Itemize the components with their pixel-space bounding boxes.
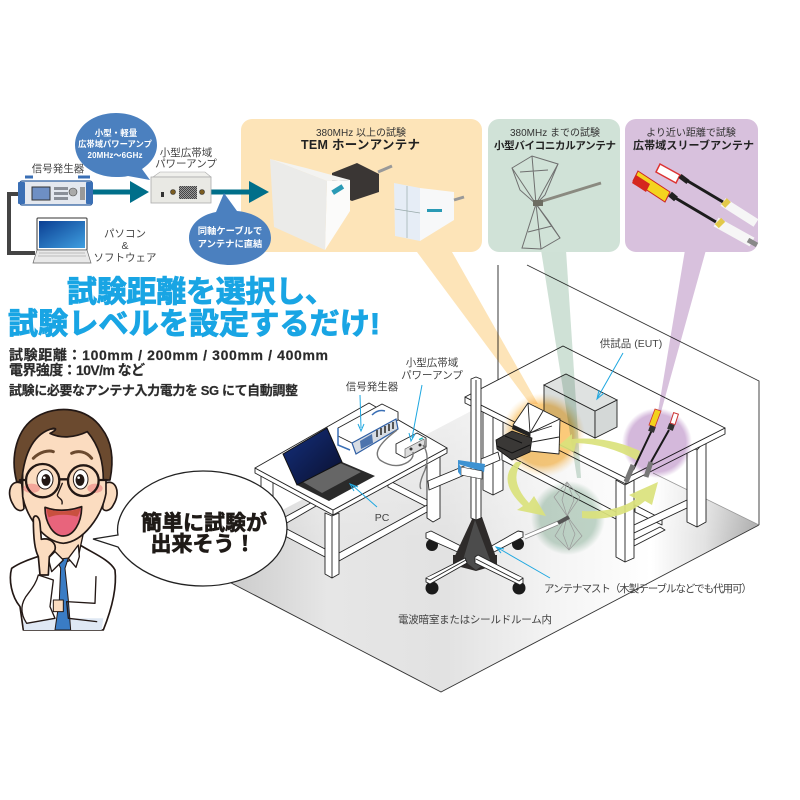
small sleeve antenna bbox=[656, 164, 756, 223]
tie bbox=[55, 558, 71, 630]
label: chamber: 電波暗室またはシールドルーム内 bbox=[398, 613, 552, 626]
black horn body bbox=[332, 163, 379, 201]
panel: TEM horn antenna bbox=[241, 119, 482, 252]
face bbox=[23, 427, 106, 543]
laptop on table bbox=[283, 428, 375, 501]
callout: compact power amp: 小型・軽量 bbox=[95, 128, 138, 138]
callout: compact power amp: 広帯域パワーアンプ bbox=[78, 139, 153, 149]
room floor bbox=[187, 397, 759, 692]
label: power amp on table: パワーアンプ bbox=[401, 370, 463, 382]
glow: biconical position bbox=[531, 481, 605, 555]
sleeve antennas in position bbox=[626, 409, 678, 482]
label: PC: PC bbox=[375, 512, 390, 524]
eyebrows bbox=[33, 451, 92, 458]
icon: laptop bbox=[33, 218, 91, 263]
crossed arm bbox=[67, 577, 97, 622]
antenna mast bbox=[426, 377, 526, 594]
signal generator on table bbox=[338, 404, 398, 454]
character: man with glasses bbox=[10, 409, 117, 630]
right table bbox=[465, 346, 725, 562]
yellow-green arrows bbox=[507, 434, 658, 519]
callout arrow: mast bbox=[496, 547, 550, 578]
mouth bbox=[45, 507, 82, 536]
cable: signal generator to PC bbox=[9, 194, 35, 253]
sleeve and forearm bbox=[22, 575, 55, 623]
text block: test parameters: 電界強度：10V/m など bbox=[9, 362, 145, 378]
title: 試験レベルを設定するだけ! bbox=[8, 308, 380, 341]
power amp on table bbox=[396, 433, 426, 458]
label: PC and software: ソフトウェア bbox=[94, 252, 156, 264]
light beam: TEM horn bbox=[417, 252, 538, 404]
icon: power amp bbox=[151, 172, 211, 203]
glow: horn position bbox=[501, 393, 585, 477]
callout arrow: power amp bbox=[409, 385, 422, 441]
panel heading: 広帯域スリーブアンテナ bbox=[633, 138, 754, 152]
second white horn bbox=[394, 183, 464, 241]
upper mouth shade bbox=[47, 508, 80, 517]
speech balloon: 出来そう！ bbox=[150, 533, 256, 556]
arrow: amp to antenna bbox=[211, 181, 269, 203]
biconical antenna bbox=[512, 156, 601, 249]
hair bbox=[14, 409, 112, 482]
label: PC and software: & bbox=[121, 240, 129, 252]
panel heading: TEM ホーンアンテナ bbox=[301, 138, 420, 152]
left table bbox=[255, 403, 447, 578]
nose bbox=[57, 483, 62, 504]
callout: compact power amp bbox=[75, 113, 157, 180]
panel heading: 小型バイコニカルアンテナ bbox=[494, 139, 616, 152]
eyes bbox=[37, 470, 88, 489]
panel subtitle: より近い距離で試験 bbox=[646, 126, 736, 139]
text block: test parameters bbox=[9, 347, 328, 398]
EUT box bbox=[544, 374, 617, 438]
mast arm bbox=[428, 452, 500, 490]
speech balloon bbox=[93, 471, 287, 586]
label: signal generator: 信号発生器 bbox=[32, 162, 85, 175]
wrist bbox=[53, 600, 63, 612]
biconical antenna on floor bbox=[525, 482, 582, 550]
arrow: signal generator to amp bbox=[92, 181, 149, 203]
callout: coaxial direct connection bbox=[189, 193, 271, 265]
label: signal generator on table: 信号発生器 bbox=[346, 380, 399, 393]
callout arrow: PC bbox=[350, 484, 377, 507]
left ear bbox=[10, 482, 24, 511]
large sleeve antenna bbox=[632, 171, 757, 245]
callout: coaxial direct connection: アンテナに直結 bbox=[198, 238, 262, 249]
neck bbox=[52, 533, 83, 563]
label: power amp: 小型広帯域 bbox=[160, 147, 212, 159]
title: 試験距離を選択し、 bbox=[67, 276, 335, 309]
icon: signal generator bbox=[18, 177, 93, 205]
glasses bbox=[20, 464, 107, 497]
label: power amp on table: 小型広帯域 bbox=[406, 357, 458, 369]
speech balloon: 簡単に試験が bbox=[141, 511, 267, 535]
light beam: sleeve bbox=[658, 250, 706, 412]
title bbox=[8, 276, 380, 341]
panel: sleeve antenna bbox=[625, 119, 758, 252]
callout: coaxial direct connection: 同軸ケーブルで bbox=[198, 225, 262, 236]
panel: biconical antenna bbox=[488, 119, 620, 252]
collar bbox=[48, 545, 79, 572]
hand and finger bbox=[33, 516, 55, 575]
callout: compact power amp: 20MHz～6GHz bbox=[88, 151, 142, 160]
cheeks bbox=[23, 484, 40, 493]
panel subtitle: 380MHz までの試験 bbox=[510, 126, 600, 139]
right ear bbox=[103, 482, 117, 511]
label: EUT: 供試品 (EUT) bbox=[600, 337, 662, 350]
text block: test parameters: 試験に必要なアンテナ入力電力を SG にて自動調整 bbox=[9, 383, 298, 398]
callout arrow: signal generator bbox=[358, 395, 364, 431]
large white horn bbox=[270, 159, 350, 250]
shirt bbox=[10, 545, 115, 630]
label: PC and software: パソコン bbox=[104, 228, 146, 240]
label: antenna mast: アンテナマスト（木製テーブルなどでも代用可） bbox=[544, 582, 752, 595]
light beam: biconical bbox=[541, 250, 581, 478]
callout arrow: EUT bbox=[597, 353, 623, 399]
room wall lines bbox=[498, 265, 759, 525]
text block: test parameters: 試験距離：100mm / 200mm / 300mm / 400mm bbox=[9, 347, 328, 363]
horn on table bbox=[496, 403, 560, 460]
glow: sleeve position bbox=[622, 408, 692, 478]
horn connector rod bbox=[378, 166, 392, 172]
cheek right bbox=[87, 484, 103, 493]
panel subtitle: 380MHz 以上の試験 bbox=[316, 126, 406, 139]
label: power amp: パワーアンプ bbox=[155, 158, 217, 170]
coaxial cables bbox=[377, 430, 427, 489]
